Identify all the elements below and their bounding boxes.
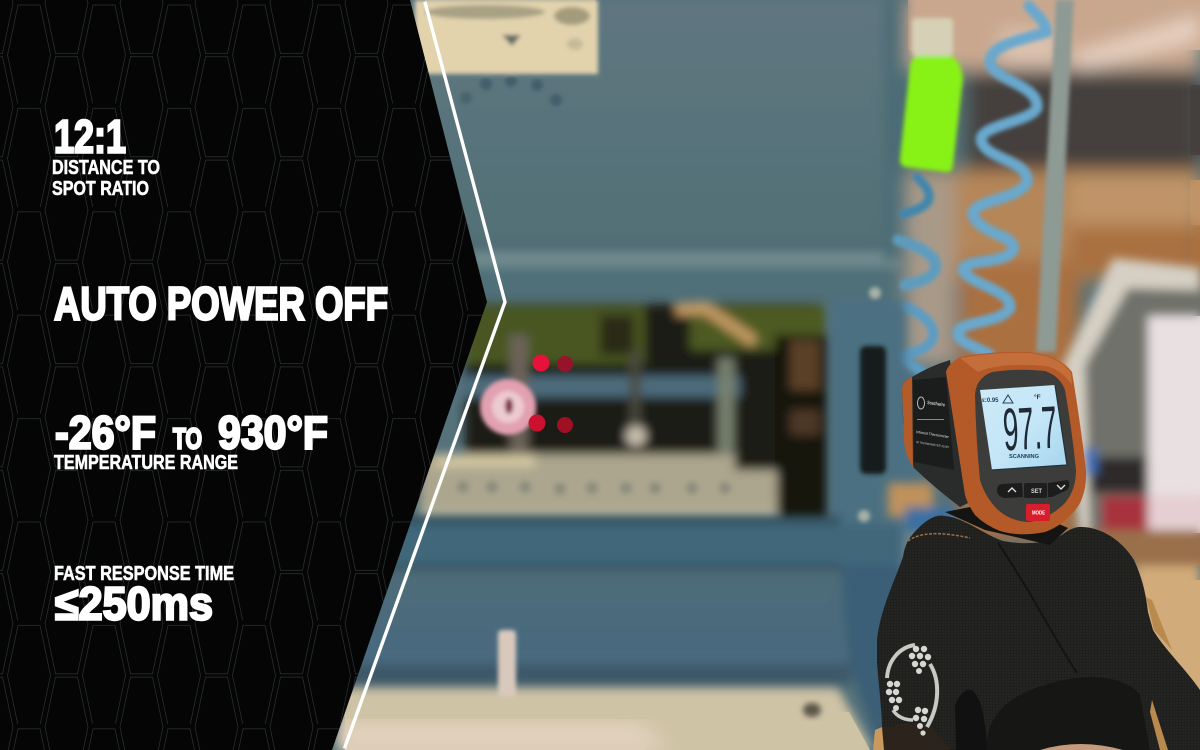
skin at bottom <box>1040 744 1123 750</box>
label distance to spot ratio: DISTANCE TO <box>52 157 160 179</box>
orange housing <box>946 352 1086 534</box>
value -26F to 930F: TO <box>173 424 202 456</box>
value -26F to 930F <box>55 406 328 458</box>
screen bezel shadow <box>992 385 1067 470</box>
label fast response time: FAST RESPONSE TIME <box>54 563 234 585</box>
down button <box>1048 480 1069 497</box>
leather highlight <box>873 727 884 750</box>
glove logo <box>886 645 937 736</box>
glove strap tab <box>955 690 987 750</box>
green tag <box>900 18 963 172</box>
feature: temperature range <box>54 406 328 474</box>
gloved hand <box>873 516 1200 750</box>
panel screw dots <box>457 481 731 495</box>
workshop wall background <box>890 0 1200 640</box>
LCD screen <box>980 385 1067 470</box>
grip under body <box>945 505 1068 545</box>
value 12:1: 12:1 <box>54 110 126 162</box>
feature: auto power off: AUTO POWER OFF <box>54 278 388 330</box>
label distance to spot ratio <box>52 157 160 200</box>
value -26F to 930F: -26°F <box>55 406 156 458</box>
feature: distance to spot ratio <box>52 110 160 200</box>
set button: SET <box>1031 489 1042 495</box>
grey face <box>975 370 1076 522</box>
floor spot <box>803 703 821 717</box>
white chevron outline <box>346 6 505 744</box>
value 250ms or less: ≤250ms <box>55 578 213 630</box>
coiled blue air hose <box>898 6 1047 374</box>
warning triangle <box>1003 395 1013 403</box>
handle on machine <box>860 346 886 474</box>
edge underlay keeping blurred colours solid at the frame <box>345 0 1200 750</box>
white post <box>498 630 516 697</box>
brand mark <box>918 397 924 409</box>
buttons <box>997 480 1069 521</box>
leather palm strip <box>1146 597 1172 650</box>
white chevron outline bottom end <box>344 744 346 748</box>
floor light patch <box>340 722 670 750</box>
orange side strip <box>902 377 913 467</box>
highlight on housing <box>960 353 1072 385</box>
lower machine body <box>340 300 905 750</box>
unit: °F <box>1034 393 1041 401</box>
side label: Southwire <box>927 400 946 409</box>
infrared thermometer <box>902 352 1086 545</box>
leather right bottom <box>1150 700 1168 750</box>
label distance to spot ratio: SPOT RATIO <box>52 178 149 200</box>
side label <box>913 377 954 470</box>
glove fold shadow <box>998 543 1077 673</box>
feature: fast response time <box>54 563 234 630</box>
up button <box>997 483 1023 498</box>
LCD screen: 97.7 <box>1001 394 1059 463</box>
leather base left <box>873 723 950 750</box>
label temperature range: TEMPERATURE RANGE <box>54 452 238 474</box>
value -26F to 930F: 930°F <box>218 406 328 458</box>
pink gauge <box>480 379 536 435</box>
metal pole <box>1036 0 1074 352</box>
right background objects <box>888 258 1200 750</box>
white chevron outline top end <box>425 2 426 6</box>
mode button: MODE <box>1032 510 1045 516</box>
rear housing black side <box>902 360 968 507</box>
floor surface <box>340 688 872 750</box>
emissivity indicator: ε:0.95 <box>982 398 999 404</box>
machine bolts <box>858 287 881 522</box>
window opening <box>420 304 828 521</box>
side label: IR THERMOMETER 31905 <box>916 440 949 449</box>
black chevron panel with hexagon pattern <box>0 0 500 750</box>
red laser dots <box>528 354 573 433</box>
machine upper panel <box>400 0 910 304</box>
thumb <box>987 677 1150 750</box>
glove seam <box>908 534 970 541</box>
side label: Infrared Thermometer <box>916 430 949 439</box>
scanning status: SCANNING <box>1009 454 1039 460</box>
paper label on machine <box>415 0 598 106</box>
